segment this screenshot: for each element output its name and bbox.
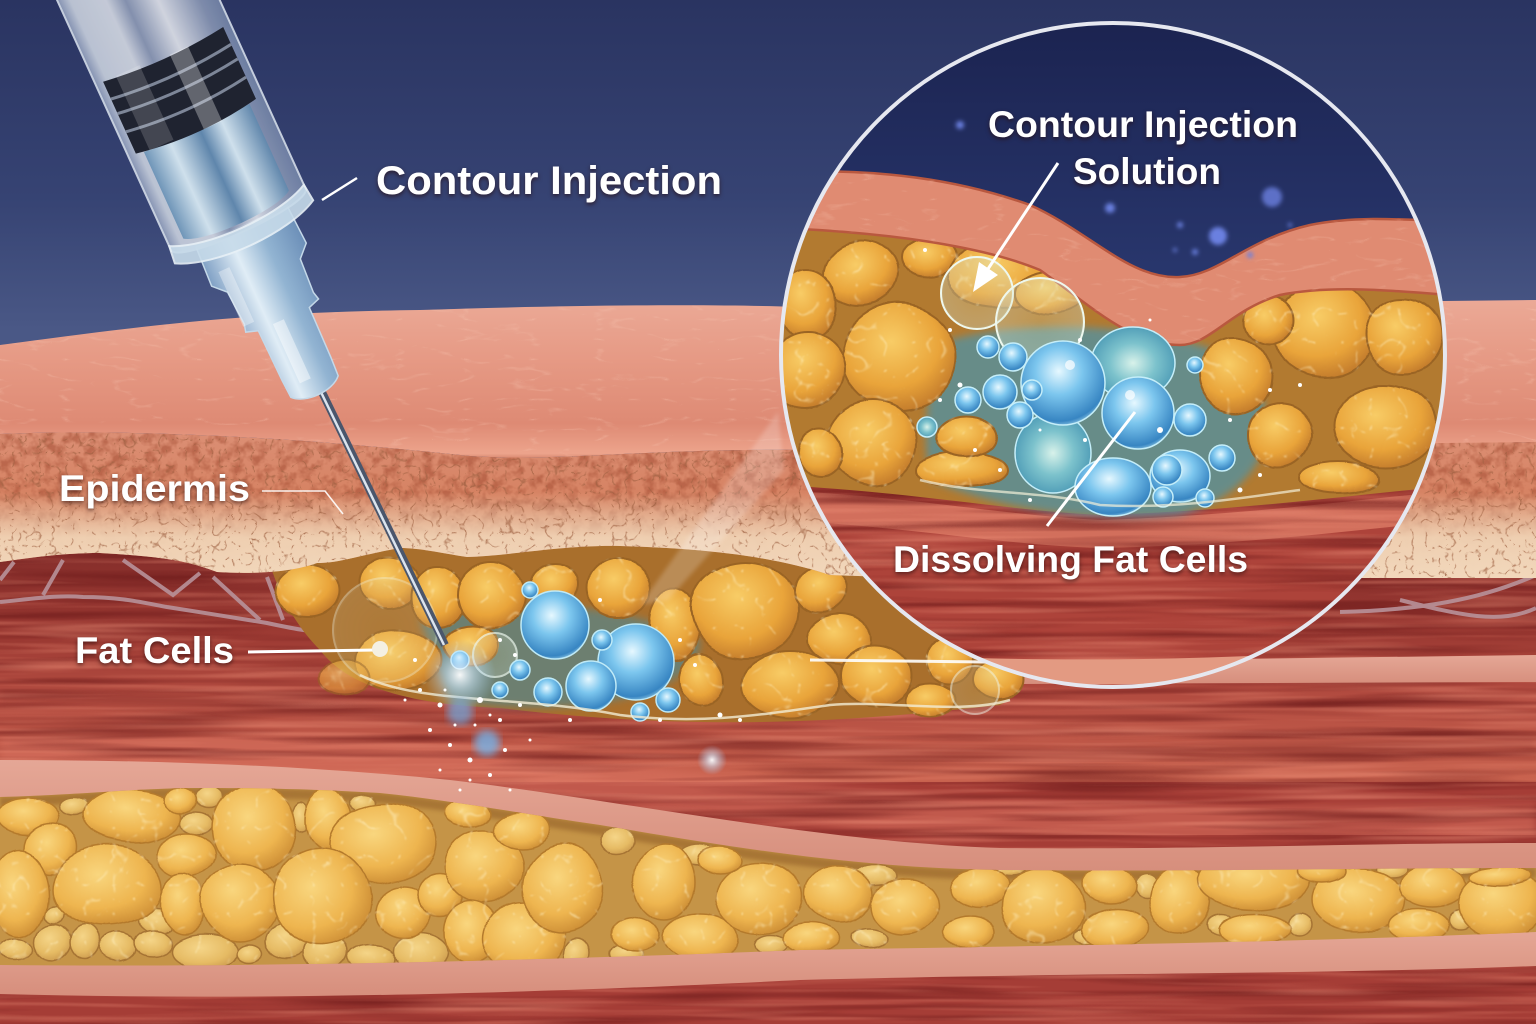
panel: skin surface — [0, 300, 1536, 465]
translucent bubble outlines — [333, 578, 999, 714]
line: dissolving pointer — [1047, 412, 1135, 526]
panel: magnified circle — [769, 20, 1460, 700]
circle blue bubbles — [917, 327, 1235, 516]
circle background — [840, 25, 1414, 276]
circle fat base — [783, 230, 1443, 515]
panel: epidermis layer — [0, 428, 1536, 580]
panel: lower muscle layer — [0, 520, 1536, 1024]
glass bubbles — [941, 257, 1084, 366]
fat cells cluster — [275, 556, 1026, 718]
circle border — [781, 23, 1445, 687]
needle — [318, 386, 445, 645]
stars in the solution — [956, 121, 1292, 258]
label: Contour Injection Solution: Solution — [1073, 151, 1221, 192]
blue dissolving bubbles — [451, 582, 680, 721]
label: Epidermis — [59, 468, 343, 514]
injection plume sparkles — [404, 598, 742, 792]
icon: syringe — [45, 0, 445, 645]
arrow: solution pointer — [973, 163, 1058, 292]
panel: upper fat pocket — [265, 537, 1026, 722]
circle skin — [808, 170, 1438, 346]
barrel end flange — [167, 184, 319, 277]
large fat cells — [0, 783, 1536, 972]
circle fat cells — [769, 238, 1443, 494]
circle sparkles — [923, 248, 1302, 502]
zoom cone callout — [640, 412, 784, 605]
panel: pale fascia bands — [0, 655, 1536, 997]
label: Dissolving Fat Cells: Dissolving Fat Cells — [893, 539, 1248, 580]
needle hub — [194, 205, 366, 416]
connective tissue mesh — [0, 560, 1536, 634]
label: Fat Cells: Fat Cells — [75, 630, 234, 671]
barrel group — [45, 0, 387, 426]
label: Fat Cells — [75, 630, 388, 671]
plunger bands — [103, 27, 258, 159]
liquid — [144, 104, 293, 247]
label: Contour Injection Solution — [988, 104, 1298, 192]
leader line to magnifier — [810, 660, 985, 662]
small filler cells — [0, 786, 1481, 971]
panel: bottom fat layer — [0, 788, 1536, 966]
circle muscle — [810, 487, 1414, 684]
label: Epidermis: Epidermis — [59, 468, 250, 509]
label: Contour Injection Solution: Contour Injection — [988, 104, 1298, 145]
label: Contour Injection: Contour Injection — [376, 159, 722, 203]
barrel — [46, 0, 311, 262]
